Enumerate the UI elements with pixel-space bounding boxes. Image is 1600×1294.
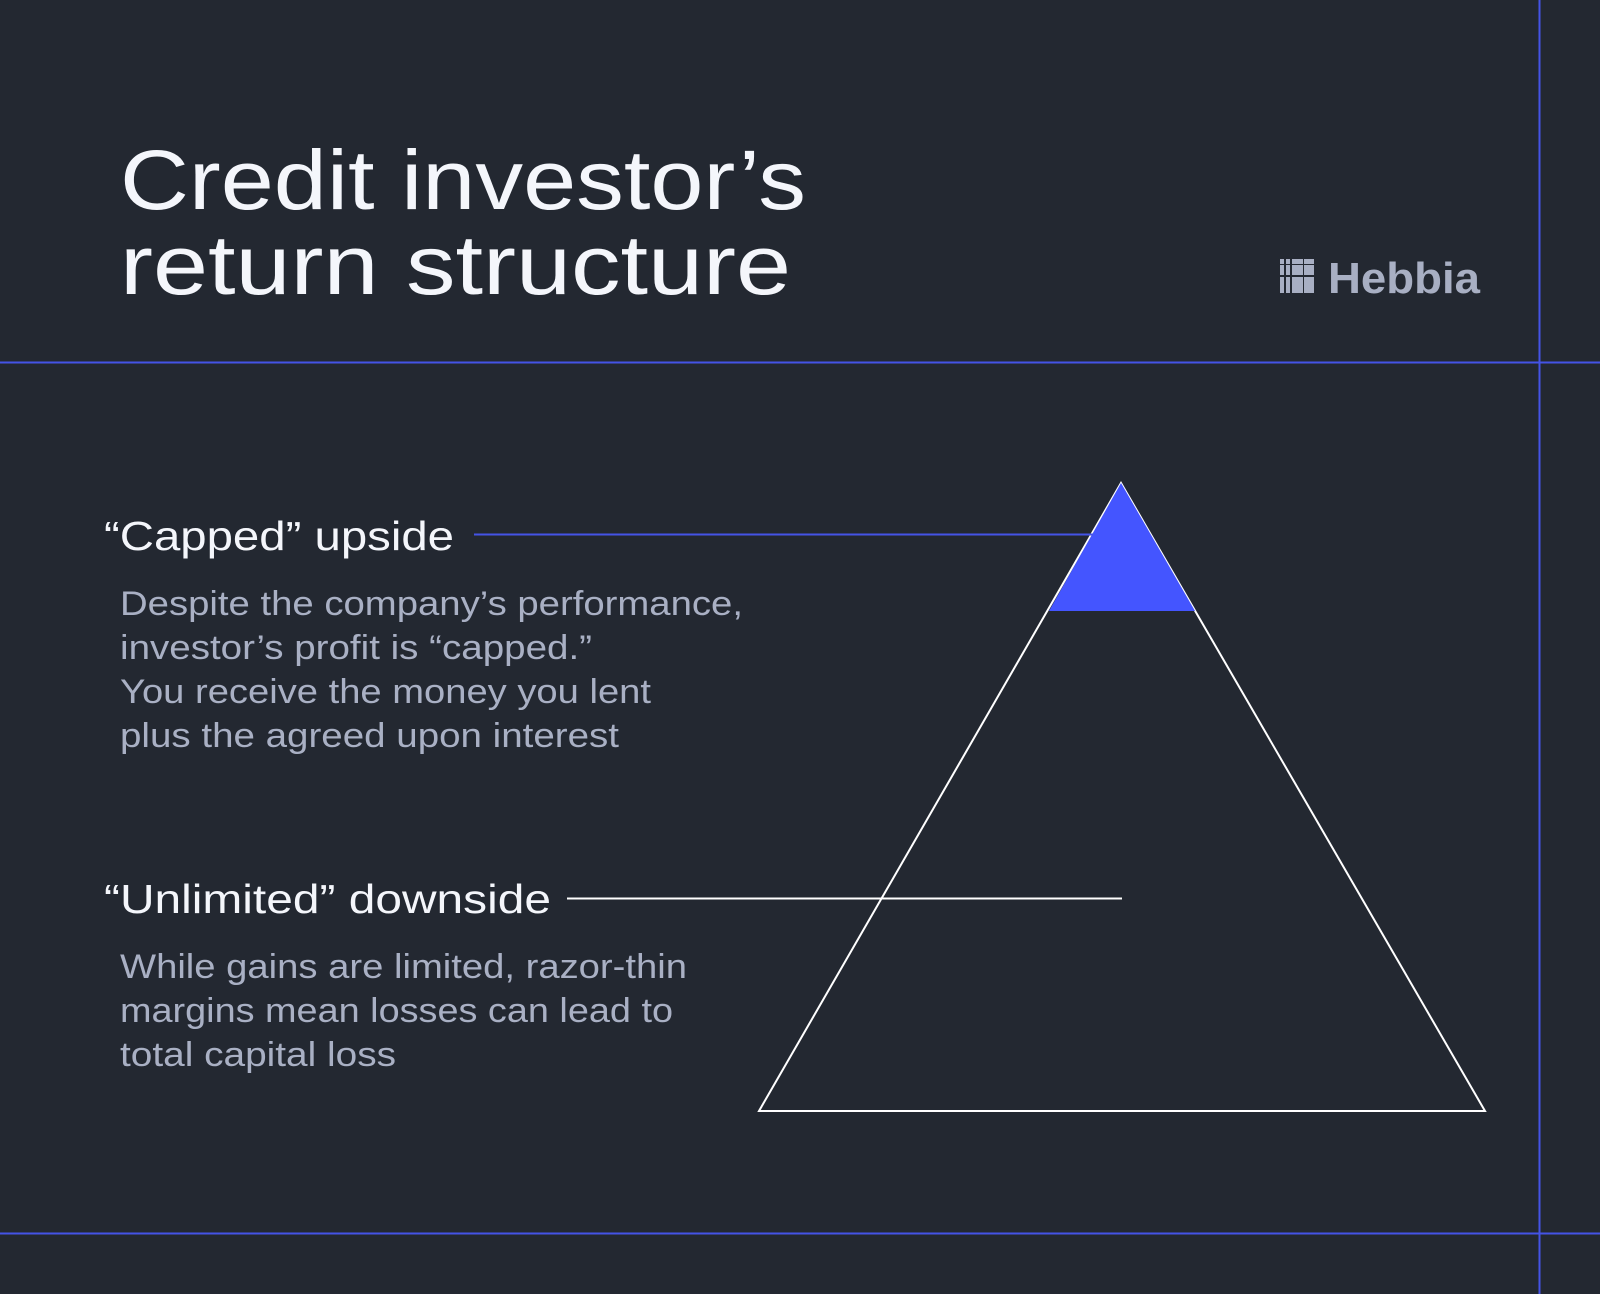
text block: capped: You receive the money you lent xyxy=(120,673,652,711)
text block: unlimited xyxy=(120,948,687,1074)
logo: Hebbia: Hebbia xyxy=(1328,254,1481,303)
text block: capped: plus the agreed upon interest xyxy=(120,717,620,755)
heading: capped upside: “Capped” upside xyxy=(104,513,454,559)
title: return structure xyxy=(120,218,791,312)
connector: unlimited xyxy=(567,898,1122,900)
triangle chart xyxy=(759,483,1485,1111)
text block: unlimited: While gains are limited, razor-thin xyxy=(120,948,687,986)
heading: unlimited downside: “Unlimited” downside xyxy=(104,876,551,922)
text block: capped: Despite the company’s performance, xyxy=(120,585,743,623)
icon: logo grid xyxy=(1280,259,1314,293)
text block: capped xyxy=(120,585,743,755)
title xyxy=(120,133,806,312)
text block: unlimited: margins mean losses can lead to xyxy=(120,992,673,1030)
connector: capped xyxy=(474,534,1093,536)
triangle apex: capped upside xyxy=(1049,483,1195,611)
text block: capped: investor’s profit is “capped.” xyxy=(120,629,592,667)
title: Credit investor’s xyxy=(120,133,806,227)
text block: unlimited: total capital loss xyxy=(120,1036,396,1074)
